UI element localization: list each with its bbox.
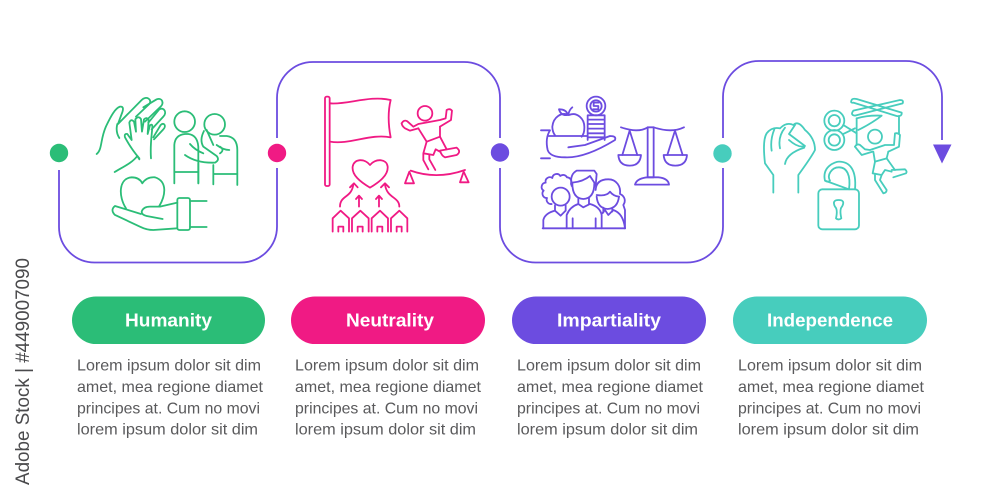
text block: Impartiality: lorem ipsum dolor sit dim	[517, 422, 698, 438]
icon: humanity	[97, 98, 237, 230]
pill: Neutrality: Neutrality	[346, 310, 435, 330]
text block: Humanity: principes at. Cum no movi	[77, 400, 260, 418]
pill: Humanity: Humanity	[125, 310, 213, 330]
text block: Humanity: amet, mea regione diamet	[77, 379, 264, 396]
pill: Impartiality: Impartiality	[557, 310, 662, 330]
pill: Humanity	[72, 296, 265, 344]
text block: Neutrality: lorem ipsum dolor sit dim	[295, 422, 476, 438]
icon: independence	[764, 99, 907, 229]
icon: impartiality	[541, 97, 687, 228]
step marker: teal dot	[713, 144, 732, 163]
connector line	[59, 61, 942, 262]
arrowhead	[933, 144, 952, 164]
text block: Neutrality: amet, mea regione diamet	[295, 379, 482, 396]
step marker: pink dot	[268, 144, 286, 162]
text block: Humanity: lorem ipsum dolor sit dim	[77, 422, 258, 438]
text block: Neutrality: principes at. Cum no movi	[295, 400, 478, 418]
step marker: purple dot	[491, 143, 509, 162]
pill: Impartiality	[512, 296, 706, 344]
text block: Impartiality: amet, mea regione diamet	[517, 379, 704, 396]
text block: Independence: principes at. Cum no movi	[738, 400, 921, 418]
text block: Humanity: Lorem ipsum dolor sit dim	[77, 358, 261, 374]
text block: Impartiality: Lorem ipsum dolor sit dim	[517, 358, 701, 374]
text block: Independence: Lorem ipsum dolor sit dim	[738, 358, 922, 374]
text block: Neutrality: Lorem ipsum dolor sit dim	[295, 358, 479, 374]
pill: Independence	[733, 296, 927, 344]
text block: Independence: lorem ipsum dolor sit dim	[738, 422, 919, 438]
text block: Impartiality: principes at. Cum no movi	[517, 400, 700, 418]
pill: Neutrality	[291, 296, 485, 344]
icon: neutrality	[325, 97, 469, 232]
step marker: green dot	[50, 144, 68, 162]
stock id label: Adobe Stock | #449007090	[13, 258, 34, 485]
text block: Independence: amet, mea regione diamet	[738, 379, 925, 396]
pill: Independence: Independence	[767, 310, 893, 330]
